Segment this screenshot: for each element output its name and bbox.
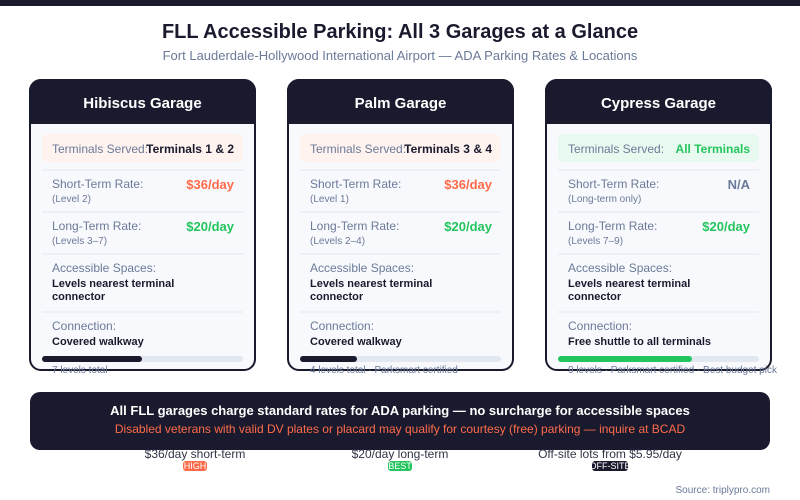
terminals served [42,134,243,162]
card heading: Palm Garage [355,95,446,112]
accessible spaces: Accessible Spaces: [310,261,414,275]
badge: best: BEST [388,461,412,471]
panel: Palm Garage: $20/day [444,219,492,234]
stat: off-site: Off-site lots from $5.95/day [538,447,682,461]
panel: Cypress Garage: N/A [728,177,750,192]
panel: Palm Garage: (Level 1) [310,194,349,205]
terminals served: Terminals 3 & 4 [404,142,492,156]
connection: Connection: [310,319,374,333]
subtitle: Fort Lauderdale-Hollywood International Airport — ADA Parking Rates & Locations [163,48,637,63]
stat: short-term: $36/day short-term [145,447,245,461]
panel: Cypress Garage: (Levels 7–9) [568,236,623,247]
terminals served: All Terminals [676,142,750,156]
progress bar [558,356,759,362]
long-term rate: Long-Term Rate: [52,219,141,233]
terminals served: Terminals Served: [310,142,406,156]
connection: Connection: [568,319,632,333]
card heading [545,79,772,124]
panel: Hibiscus Garage: (Levels 3–7) [52,236,107,247]
source: Source: triplypro.com [676,485,770,496]
panel: Cypress Garage: connector [568,291,621,303]
card heading: Hibiscus Garage [83,95,202,112]
panel: Hibiscus Garage: (Level 2) [52,194,91,205]
panel: Palm Garage: (Levels 2–4) [310,236,365,247]
panel: Cypress Garage [545,79,772,371]
accessible spaces: Accessible Spaces: [568,261,672,275]
panel: Cypress Garage: $20/day [702,219,750,234]
progress bar [42,356,243,362]
card heading [29,79,256,124]
long-term rate: Long-Term Rate: [310,219,399,233]
card heading: Cypress Garage [601,95,716,112]
panel: Hibiscus Garage: $36/day [186,177,234,192]
banner headline: All FLL garages charge standard rates for ADA parking — no surcharge for accessible spaces [110,403,690,418]
stat: long-term: $20/day long-term [352,447,448,461]
panel: Palm Garage: Covered walkway [310,336,402,348]
panel: Palm Garage: connector [310,291,363,303]
panel: Palm Garage [287,79,514,371]
panel: Hibiscus Garage: Levels nearest terminal [52,278,174,290]
callout banner [30,392,770,450]
banner note: Disabled veterans with valid DV plates or placard may qualify for courtesy (free) parking — inquire at BCAD [115,422,685,436]
bar note: 7 levels total [52,365,108,376]
short-term rate: Short-Term Rate: [568,177,659,191]
panel: Cypress Garage: Free shuttle to all terminals [568,336,711,348]
panel: Hibiscus Garage: Covered walkway [52,336,144,348]
badge: high: HIGH [184,461,206,471]
short-term rate: Short-Term Rate: [52,177,143,191]
bar note: 9 levels · Parksmart certified · Best budget pick [568,365,777,376]
panel: Cypress Garage: Levels nearest terminal [568,278,690,290]
panel: Hibiscus Garage: $20/day [186,219,234,234]
panel: Palm Garage: Levels nearest terminal [310,278,432,290]
terminals served: Terminals 1 & 2 [146,142,234,156]
title: FLL Accessible Parking: All 3 Garages at a Glance [162,21,638,43]
long-term rate: Long-Term Rate: [568,219,657,233]
short-term rate: Short-Term Rate: [310,177,401,191]
card heading [287,79,514,124]
panel: Palm Garage: $36/day [444,177,492,192]
panel: Hibiscus Garage [29,79,256,371]
panel: Cypress Garage: (Long-term only) [568,194,641,205]
panel: Hibiscus Garage: connector [52,291,105,303]
terminals served [558,134,759,162]
bar note: 4 levels total · Parksmart certified [310,365,458,376]
terminals served: Terminals Served: [568,142,664,156]
connection: Connection: [52,319,116,333]
terminals served [300,134,501,162]
terminals served: Terminals Served: [52,142,148,156]
accessible spaces: Accessible Spaces: [52,261,156,275]
top bar [0,0,800,6]
progress bar [300,356,501,362]
